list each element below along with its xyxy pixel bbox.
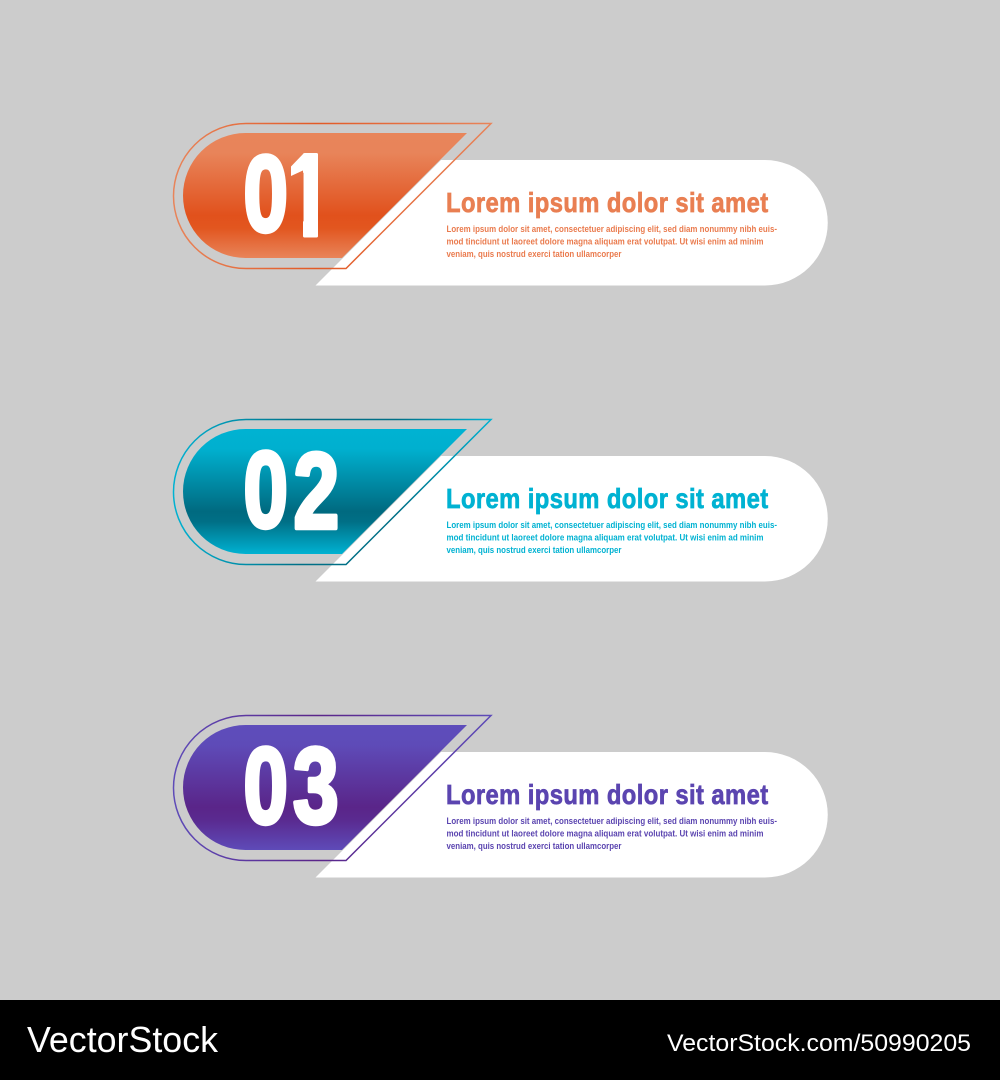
number 01 <box>245 153 318 238</box>
white text card 01 <box>316 160 828 286</box>
body text 03: Lorem ipsum dolor sit amet, consectetuer adipiscing elit, sed diam nonummy nibh euis- <box>446 816 777 827</box>
badge outline 02 <box>174 420 491 564</box>
badge outline 03 <box>174 716 491 860</box>
purple badge 03 <box>183 725 467 850</box>
body text 02: mod tincidunt ut laoreet dolore magna aliquam erat volutpat. Ut wisi enim ad minim <box>446 532 764 544</box>
badge outline 01 <box>174 124 491 268</box>
body text 02: Lorem ipsum dolor sit amet, consectetuer adipiscing elit, sed diam nonummy nibh euis- <box>446 520 777 531</box>
panel: step 03 <box>174 716 828 878</box>
body text 01: mod tincidunt ut laoreet dolore magna aliquam erat volutpat. Ut wisi enim ad minim <box>446 236 764 248</box>
white text card 02 <box>316 456 828 582</box>
body text 02 <box>446 520 777 556</box>
footer image id: VectorStock.com/50990205 <box>667 1030 971 1057</box>
body text 01: Lorem ipsum dolor sit amet, consectetuer adipiscing elit, sed diam nonummy nibh euis- <box>446 224 777 235</box>
body text 02: veniam, quis nostrud exerci tation ullamcorper <box>446 545 622 556</box>
number 02 <box>244 430 339 552</box>
body text 03: mod tincidunt ut laoreet dolore magna aliquam erat volutpat. Ut wisi enim ad minim <box>446 828 764 840</box>
white text card 03 <box>316 752 828 878</box>
footer bar <box>0 1000 1000 1080</box>
panel: step 01 <box>174 124 828 286</box>
body text 03: veniam, quis nostrud exerci tation ullamcorper <box>446 841 622 852</box>
number 03 <box>244 726 339 847</box>
heading 02: Lorem ipsum dolor sit amet <box>446 482 768 514</box>
number 02: 2 <box>294 431 339 552</box>
number 03: 3 <box>293 726 339 847</box>
orange badge 01 <box>183 133 467 258</box>
heading 01: Lorem ipsum dolor sit amet <box>446 186 768 218</box>
body text 03 <box>446 816 777 852</box>
number 01: 0 <box>244 134 288 255</box>
number 02: 0 <box>244 430 288 551</box>
body text 01 <box>446 224 777 260</box>
blue badge 02 <box>183 429 467 554</box>
heading 03: Lorem ipsum dolor sit amet <box>446 778 768 810</box>
number 03: 0 <box>244 726 288 847</box>
body text 01: veniam, quis nostrud exerci tation ullamcorper <box>446 249 622 260</box>
number 01: 1 <box>276 129 348 262</box>
footer logo text: VectorStock <box>27 1019 219 1060</box>
panel: step 02 <box>174 420 828 582</box>
